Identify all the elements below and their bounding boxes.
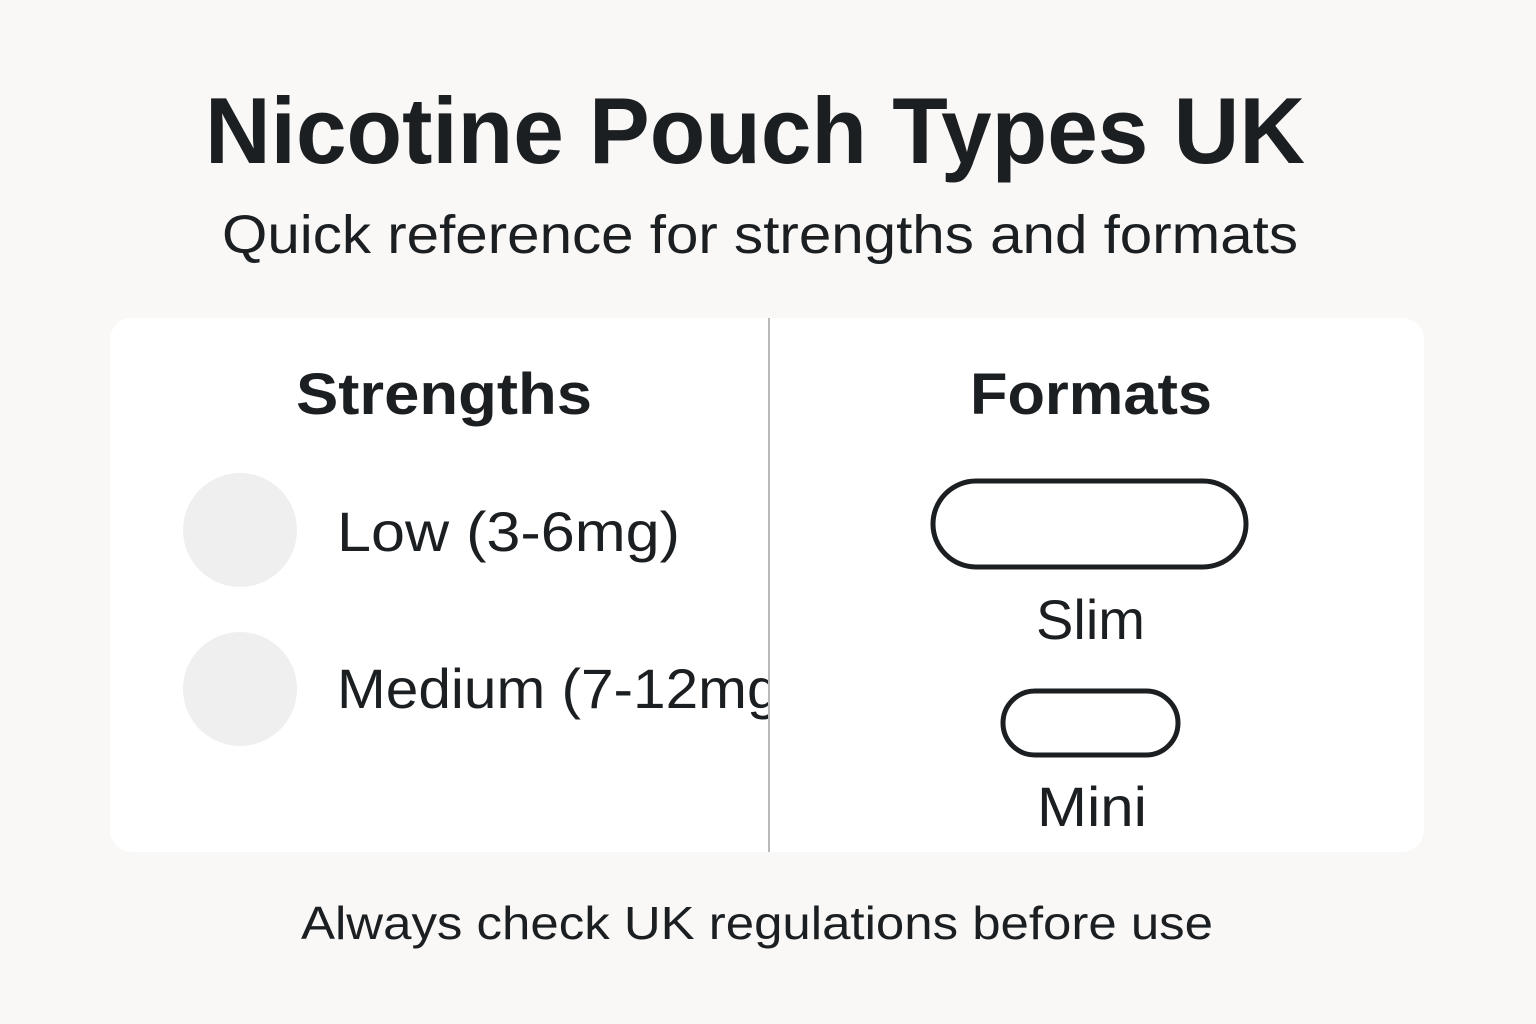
panel: card <box>110 318 1424 852</box>
label: medium: Medium (7-12mg) <box>337 657 799 720</box>
footer note: Always check UK regulations before use <box>301 897 1213 949</box>
panel: formats <box>933 362 1246 838</box>
icon: medium circle <box>183 632 297 746</box>
heading: formats: Formats <box>970 362 1212 427</box>
label: slim: Slim <box>1036 588 1145 651</box>
icon: mini pouch <box>1003 691 1178 755</box>
heading: strengths: Strengths <box>296 362 592 427</box>
icon: slim pouch <box>933 481 1246 567</box>
label: mini: Mini <box>1037 775 1147 838</box>
label: low: Low (3-6mg) <box>337 500 680 563</box>
icon: low circle <box>183 473 297 587</box>
panel: strengths <box>183 362 799 746</box>
subtitle: Quick reference for strengths and formats <box>222 205 1298 265</box>
title: Nicotine Pouch Types UK <box>205 78 1305 183</box>
